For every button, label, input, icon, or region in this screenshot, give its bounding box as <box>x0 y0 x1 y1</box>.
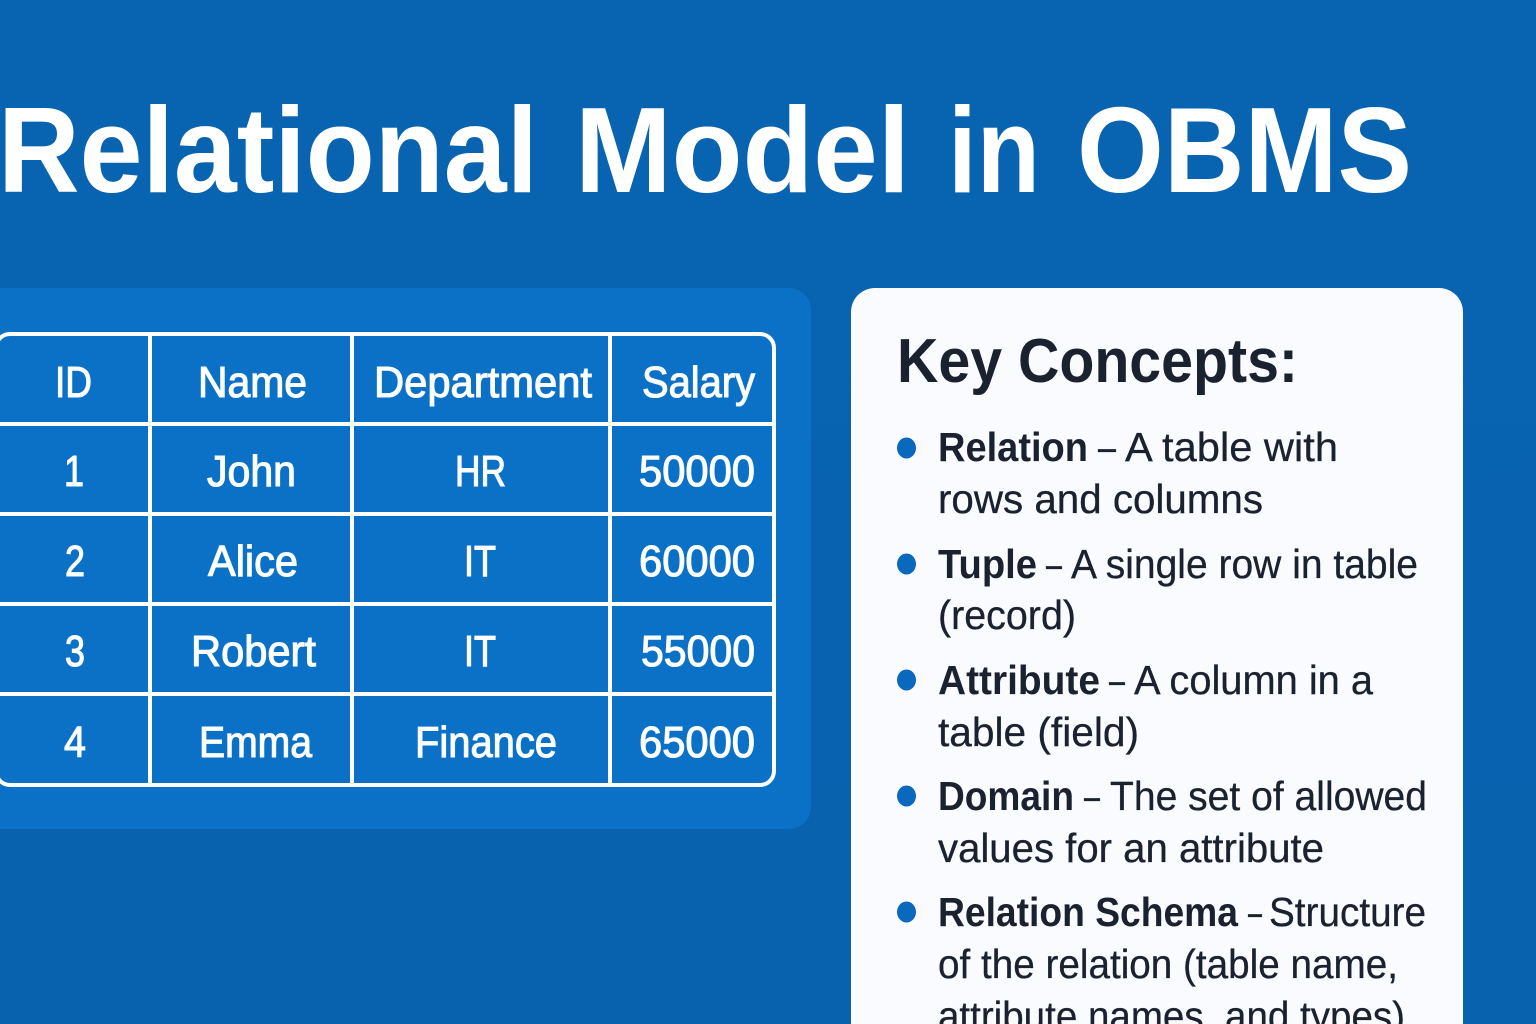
row: John: HR <box>455 447 506 496</box>
item: domain: – <box>1084 773 1100 819</box>
row: Emma: 65000 <box>639 718 755 767</box>
item: attribute: – <box>1109 657 1125 703</box>
row: John: 1 <box>64 447 84 496</box>
row: Alice: Alice <box>208 537 298 586</box>
item: relation schema: Structure <box>1269 889 1426 935</box>
item: relation schema <box>897 889 1426 1024</box>
table header row: Department <box>374 358 592 407</box>
item: tuple: A single row in table <box>1071 541 1418 587</box>
row: Alice: IT <box>464 537 496 586</box>
table header row <box>55 358 755 407</box>
item: tuple: (record) <box>938 592 1076 638</box>
row: Robert: IT <box>464 627 496 676</box>
panel: key concepts <box>851 288 1463 1024</box>
item: attribute: table (field) <box>938 709 1139 755</box>
item: attribute: A column in a <box>1134 657 1373 703</box>
panel: table card <box>0 288 811 829</box>
row: Robert <box>65 627 755 676</box>
heading: Key Concepts: <box>897 327 1298 396</box>
item: relation: A table with <box>1125 424 1338 470</box>
table header row: Salary <box>642 358 755 407</box>
title: OBMS <box>1077 82 1412 218</box>
table header row: ID <box>55 358 92 407</box>
item: attribute: Attribute <box>938 657 1100 703</box>
row: Alice: 60000 <box>639 537 755 586</box>
table header row: Name <box>198 358 307 407</box>
item: tuple: – <box>1046 541 1062 587</box>
item: tuple: Tuple <box>938 541 1037 587</box>
item: relation: rows and columns <box>938 476 1263 522</box>
row: Emma: Emma <box>199 718 312 767</box>
row: Emma <box>64 718 755 767</box>
title: in <box>948 82 1040 218</box>
item: relation: Relation <box>938 424 1088 470</box>
row: Alice: 2 <box>65 537 85 586</box>
row: Robert: Robert <box>191 627 316 676</box>
title: Relational <box>0 82 538 218</box>
item: tuple <box>897 541 1418 638</box>
item: domain: Domain <box>938 773 1074 819</box>
row: Alice <box>65 537 755 586</box>
item: domain <box>897 773 1427 871</box>
item: relation schema: Relation Schema <box>938 889 1239 935</box>
row: John: 50000 <box>639 447 755 496</box>
item: attribute <box>897 657 1373 755</box>
row: Emma: 4 <box>64 718 86 767</box>
item: relation schema: – <box>1248 889 1262 935</box>
item: domain: The set of allowed <box>1110 773 1427 819</box>
title <box>0 82 1412 218</box>
row: Emma: Finance <box>415 718 557 767</box>
item: relation schema: of the relation (table name, <box>938 941 1398 987</box>
row: John: John <box>207 447 296 496</box>
data table <box>0 334 774 785</box>
item: relation <box>897 424 1338 522</box>
table grid <box>0 334 774 785</box>
row: Robert: 3 <box>65 627 85 676</box>
item: domain: values for an attribute <box>938 825 1324 871</box>
row: Robert: 55000 <box>641 627 755 676</box>
item: relation: – <box>1098 424 1116 470</box>
title: Model <box>575 82 910 218</box>
row: John <box>64 447 755 496</box>
